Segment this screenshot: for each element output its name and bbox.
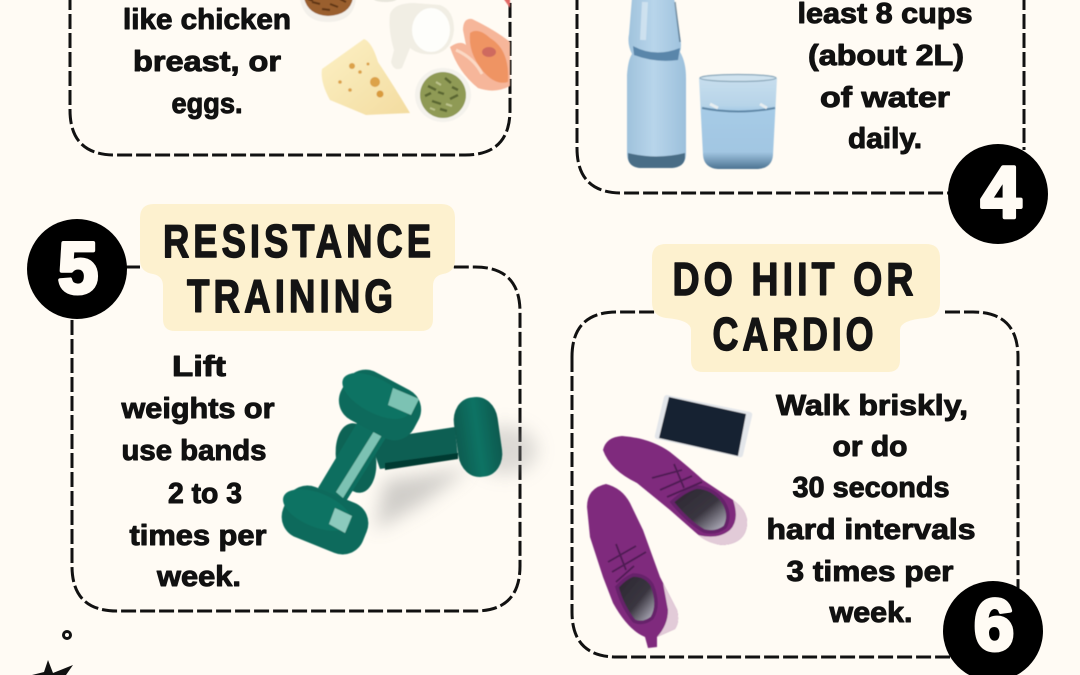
badge: 4: 4 bbox=[981, 153, 1021, 233]
body text: water: daily. bbox=[848, 123, 922, 155]
panel: HIIT or cardio bbox=[572, 244, 1043, 675]
badge: 5: 5 bbox=[58, 229, 98, 309]
body text: HIIT or cardio: Walk briskly, bbox=[776, 390, 968, 422]
body text: HIIT or cardio bbox=[766, 390, 976, 629]
heading: do HIIT or cardio: CARDIO bbox=[712, 308, 878, 360]
body text: resistance training bbox=[120, 351, 274, 593]
body text: water: (about 2L) bbox=[808, 40, 964, 72]
heading: resistance training bbox=[140, 204, 455, 331]
heading: do HIIT or cardio bbox=[652, 244, 940, 372]
decorative star doodle bbox=[32, 632, 73, 675]
body text: protein bbox=[123, 4, 291, 120]
body text: HIIT or cardio: 3 times per bbox=[786, 556, 954, 588]
body text: protein: eggs. bbox=[172, 88, 242, 120]
image: purple sneakers bbox=[587, 436, 747, 648]
heading: do HIIT or cardio: DO HIIT OR bbox=[672, 253, 918, 305]
heading: resistance training: TRAINING bbox=[187, 270, 397, 322]
panel: water (top right) bbox=[577, 0, 1048, 244]
body text: resistance training: use bands bbox=[122, 435, 266, 467]
body text: resistance training: weights or bbox=[120, 393, 274, 425]
body text: resistance training: 2 to 3 bbox=[168, 478, 242, 510]
image: glass of water bbox=[699, 74, 777, 169]
image: green dumbbells bbox=[275, 362, 537, 561]
badge: 6: 6 bbox=[974, 586, 1014, 666]
heading: resistance training: RESISTANCE bbox=[163, 215, 435, 267]
body text: HIIT or cardio: hard intervals bbox=[766, 514, 976, 546]
badge: 6 bbox=[943, 581, 1043, 675]
body text: HIIT or cardio: week. bbox=[828, 597, 912, 629]
body text: protein: like chicken bbox=[123, 4, 291, 36]
body text: HIIT or cardio: 30 seconds bbox=[792, 472, 950, 504]
badge: 5 bbox=[27, 219, 127, 319]
body text: protein: breast, or bbox=[133, 46, 281, 78]
image: protein foods bbox=[300, 0, 510, 122]
body text: resistance training: week. bbox=[156, 561, 241, 593]
body text: HIIT or cardio: or do bbox=[832, 431, 908, 463]
image: water bottle bbox=[627, 0, 686, 168]
panel: protein (top left) bbox=[70, 0, 510, 155]
image: smartphone bbox=[655, 395, 752, 457]
panel: resistance training bbox=[27, 204, 537, 611]
body text: water: of water bbox=[820, 82, 950, 114]
body text: water bbox=[798, 0, 972, 155]
body text: resistance training: Lift bbox=[172, 351, 226, 383]
body text: resistance training: times per bbox=[130, 520, 266, 552]
badge: 4 bbox=[948, 144, 1048, 244]
